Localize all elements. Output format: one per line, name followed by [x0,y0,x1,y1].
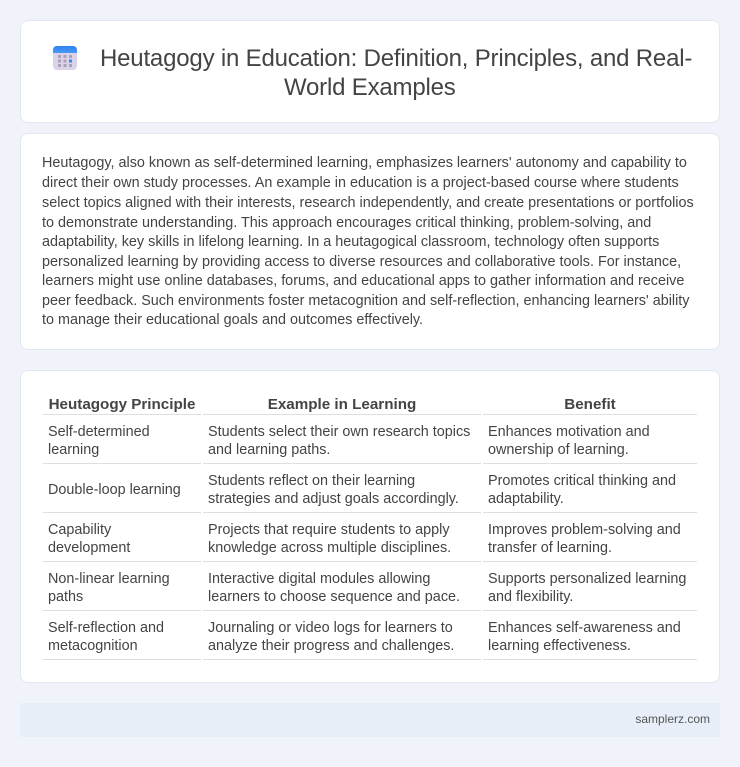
table row 1: Self-determined [48,424,150,440]
table row 1 [43,424,697,464]
panel: principles table [20,370,720,683]
table header: Example in Learning [268,396,416,413]
table row 5: analyze their progress and challenges. [208,638,454,654]
table row 4: Non-linear learning [48,571,170,587]
table row 5: Journaling or video logs for learners to [208,620,453,636]
table row 2 [43,473,697,513]
table header [43,396,697,415]
table row 5 [43,620,697,660]
text block: introduction paragraph: to manage their educational goals and outcomes effectively. [42,312,423,328]
icon: calendar [53,46,77,70]
table row 2: Students reflect on their learning [208,473,415,489]
text block: introduction paragraph: direct their own study processes. An example in education is a project-based course where students [42,175,679,191]
table header: Heutagogy Principle [49,396,195,413]
footer bar [20,703,720,737]
table row 1: Enhances motivation and [488,424,650,440]
table row 4: paths [48,589,83,605]
table row 2: Double-loop learning [48,482,181,498]
table row 3: Improves problem-solving and [488,522,681,538]
table row 4 [43,571,697,611]
table header: Benefit [564,396,616,413]
table row 3: transfer of learning. [488,540,612,556]
panel: introduction text [20,133,720,350]
table row 3: Capability [48,522,111,538]
table row 2: adaptability. [488,491,564,507]
table row 5: learning effectiveness. [488,638,631,654]
table row 1: Students select their own research topics [208,424,470,440]
text block: introduction paragraph: learners might use online databases, forums, and educational apps to gather information and receive [42,273,684,289]
panel: title card [20,20,720,123]
footer text: samplerz.com [635,712,710,726]
text block: introduction paragraph: adaptability, key skills in lifelong learning. In a heutagogical classroom, technology often supports [42,234,659,250]
table row 1: learning [48,442,99,458]
table row 1: and learning paths. [208,442,330,458]
table row 4: Supports personalized learning [488,571,686,587]
table row 5: metacognition [48,638,138,654]
text block: introduction paragraph: to demonstrate understanding. This approach encourages critical thinking, problem-solving, and [42,215,651,231]
table row 4: learners to choose sequence and pace. [208,589,460,605]
title: World Examples [284,74,456,101]
table row 3: knowledge across multiple disciplines. [208,540,451,556]
table row 2: Promotes critical thinking and [488,473,676,489]
table row 1: ownership of learning. [488,442,629,458]
table row 4: and flexibility. [488,589,573,605]
table row 3 [43,522,697,562]
title [100,45,692,101]
table row 2: strategies and adjust goals accordingly. [208,491,459,507]
table row 3: Projects that require students to apply [208,522,450,538]
text block: introduction paragraph: Heutagogy, also known as self-determined learning, emphasizes learners' autonomy and capability to [42,155,687,171]
table row 3: development [48,540,130,556]
table row 5: Enhances self-awareness and [488,620,681,636]
table row 4: Interactive digital modules allowing [208,571,430,587]
text block: introduction paragraph: select topics aligned with their interests, research independently, and create presentations or portfolios [42,195,694,211]
table row 5: Self-reflection and [48,620,164,636]
text block: introduction paragraph [42,155,694,328]
title: Heutagogy in Education: Definition, Principles, and Real- [100,45,692,72]
text block: introduction paragraph: personalized learning by providing access to diverse resources and collaborative tools. For instance, [42,254,681,270]
text block: introduction paragraph: peer feedback. Such environments foster metacognition and self-reflection, enhancing learners' ability [42,293,690,309]
